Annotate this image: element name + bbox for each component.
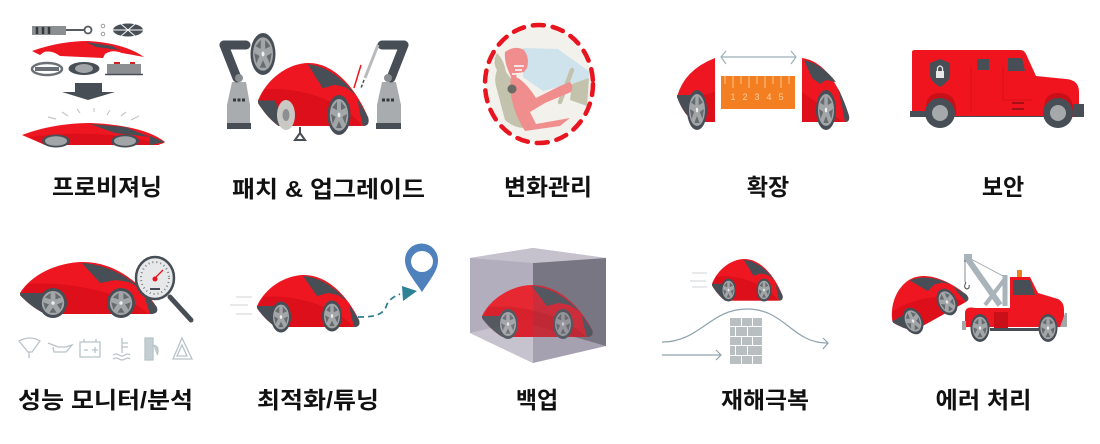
- icon: crash test driver: [486, 26, 592, 142]
- icon: towed car: [879, 259, 970, 338]
- arrow: width dimension: [721, 51, 796, 64]
- heading: 보안: [982, 174, 1024, 200]
- icon: car on jack: [258, 63, 369, 140]
- heading: 재해극복: [721, 387, 809, 413]
- icon: car parts: [32, 24, 144, 75]
- panel: error handling: [879, 254, 1067, 413]
- icon: right robot arm: [354, 45, 404, 129]
- icon: ruler: 2: [742, 92, 748, 102]
- panel: change management: [485, 25, 593, 200]
- arrow: route: [358, 286, 417, 317]
- icon: armored truck: [910, 50, 1084, 128]
- icon: car: [20, 262, 157, 318]
- panel: patch and upgrade: [224, 33, 425, 202]
- icon: car rear half: [677, 58, 715, 130]
- panel: disaster recovery: [662, 259, 828, 413]
- heading: 성능 모니터/분석: [18, 387, 193, 413]
- heading: 변화관리: [504, 174, 592, 200]
- speed lines: [230, 297, 252, 314]
- panel: scaling: [677, 51, 849, 200]
- icon: ruler: [721, 76, 795, 109]
- icon: tow truck: [962, 254, 1067, 342]
- heading: 패치 & 업그레이드: [232, 176, 425, 202]
- icon: location pin: [405, 244, 438, 292]
- heading: 백업: [516, 387, 558, 413]
- arrow: blocked: [662, 350, 721, 360]
- icon: ruler: 5: [778, 92, 784, 102]
- arrow: assemble: [62, 83, 115, 100]
- panel: optimization and tuning: [230, 244, 438, 413]
- icon: assembled flat car: [22, 123, 165, 148]
- icon: spare wheel: [250, 33, 276, 75]
- icon: car front half: [802, 58, 849, 130]
- heading: 확장: [747, 174, 789, 200]
- icon: left robot arm: [224, 45, 251, 129]
- heading: 프로비져닝: [52, 174, 162, 200]
- icon: ruler: 1: [730, 92, 736, 102]
- heading: 에러 처리: [936, 387, 1032, 413]
- icon: car: [257, 275, 359, 332]
- icon: transparent box back: [470, 248, 606, 363]
- icon: gauge magnifier: [136, 257, 191, 320]
- icon: ruler: 4: [766, 92, 772, 102]
- icons: dashboard warning lights: [19, 338, 192, 360]
- icon: car in box: [482, 285, 593, 339]
- icon: brick wall: [730, 318, 762, 364]
- dashed ring: [485, 25, 593, 143]
- box overlay: [533, 258, 606, 363]
- arrow: around obstacle: [662, 309, 828, 349]
- icon: ruler: 3: [754, 92, 760, 102]
- panel: security: [910, 50, 1084, 200]
- heading: 최적화/튜닝: [257, 387, 379, 413]
- icon: car: [712, 259, 783, 302]
- speed lines: [690, 273, 707, 287]
- panel: provisioning: [22, 24, 165, 200]
- icon: shine lines: [48, 108, 139, 120]
- panel: performance monitoring: [18, 257, 193, 413]
- panel: backup: [470, 248, 606, 413]
